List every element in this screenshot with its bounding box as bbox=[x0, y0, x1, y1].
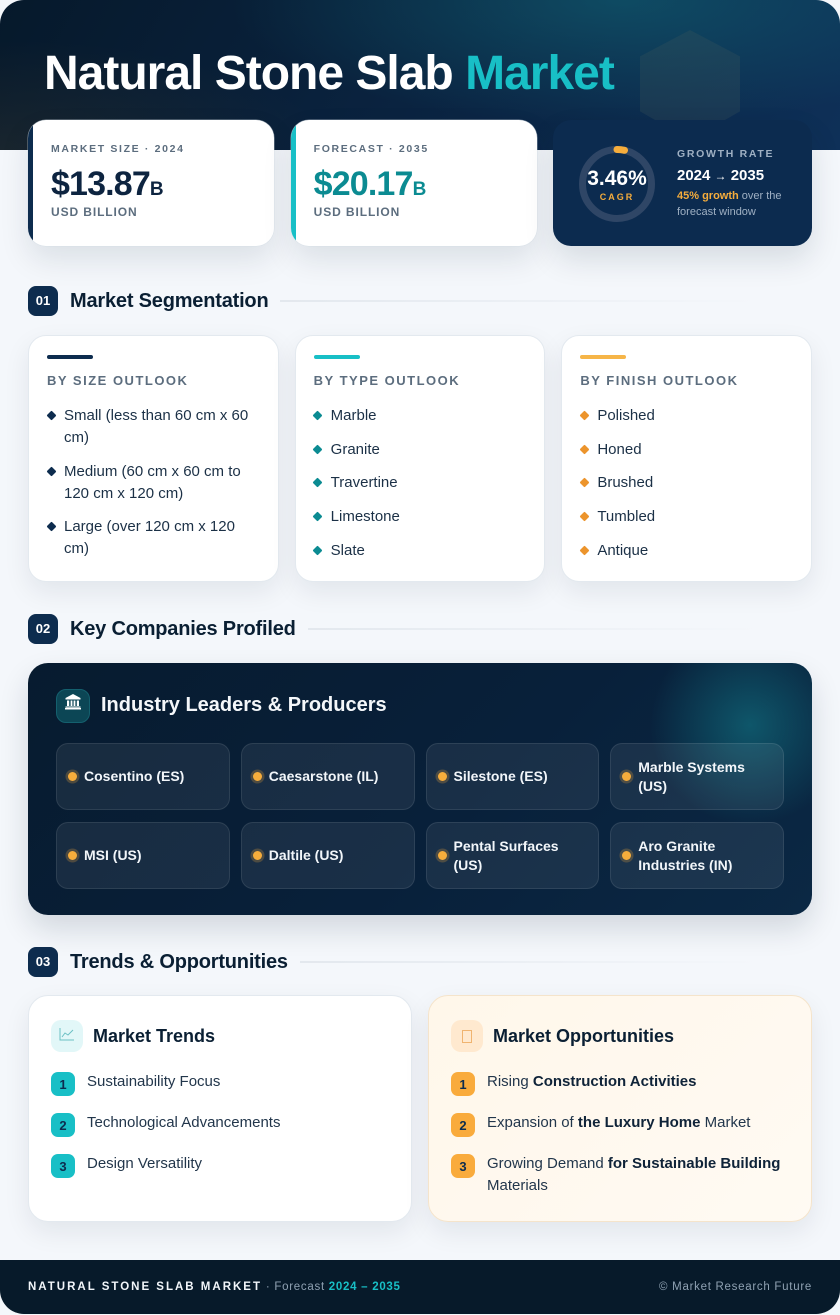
section heading: segmentation: 01 bbox=[36, 293, 50, 308]
stat card: market size: USD BILLION bbox=[51, 205, 138, 219]
company: Pental Surfaces bbox=[426, 822, 599, 889]
CAGR label: CAGR bbox=[600, 192, 634, 202]
company: Cosentino: Cosentino (ES) bbox=[84, 768, 184, 784]
panel: size outlook: 120 cm x 120 cm) bbox=[64, 484, 183, 502]
panel: market opportunities bbox=[428, 995, 812, 1222]
panel: finish outlook: Antique bbox=[597, 542, 648, 558]
panel: market trends: Sustainability Focus bbox=[87, 1072, 220, 1090]
panel: size outlook: cm) bbox=[64, 540, 89, 556]
section heading: companies bbox=[28, 614, 546, 644]
company: Silestone: Silestone (ES) bbox=[454, 768, 548, 784]
panel: size outlook: cm) bbox=[64, 428, 89, 446]
panel: companies bbox=[28, 663, 812, 915]
company: MSI bbox=[56, 822, 230, 889]
panel: market trends bbox=[28, 995, 412, 1222]
stat card: market size: MARKET SIZE · 2024 bbox=[51, 143, 185, 155]
footer title: NATURAL STONE SLAB MARKET · Forecast 2024 – 2035 bbox=[28, 1281, 401, 1293]
panel: market trends: Market Trends bbox=[93, 1026, 215, 1046]
company: MSI: MSI (US) bbox=[84, 847, 142, 863]
growth note bbox=[677, 190, 782, 218]
growth label: GROWTH RATE bbox=[677, 148, 774, 160]
company: Aro Granite: Industries (IN) bbox=[638, 856, 732, 872]
company: Marble Systems: (US) bbox=[638, 778, 667, 794]
footer credit: © Market Research Future bbox=[659, 1281, 812, 1293]
company: Silestone bbox=[426, 743, 599, 810]
section heading: segmentation: Market Segmentation bbox=[70, 290, 268, 312]
title: Natural Stone Slab Market bbox=[44, 47, 614, 100]
company: Pental Surfaces: Pental Surfaces bbox=[454, 838, 559, 854]
panel: market trends: Design Versatility bbox=[87, 1154, 202, 1172]
header banner bbox=[0, 0, 840, 150]
company: Daltile bbox=[241, 822, 414, 889]
section heading: segmentation bbox=[28, 286, 532, 316]
icon: placeholder box bbox=[451, 1020, 483, 1052]
panel heading: Industry Leaders & Producers bbox=[101, 694, 387, 716]
icon: chart bbox=[51, 1020, 83, 1052]
panel: finish outlook: Polished bbox=[597, 406, 655, 424]
growth note: forecast window bbox=[677, 206, 756, 218]
panel: finish outlook: Honed bbox=[597, 440, 642, 458]
company: Aro Granite: Aro Granite bbox=[638, 838, 715, 854]
company: Marble Systems: Marble Systems bbox=[638, 758, 745, 774]
panel: size outlook: Large (over 120 cm x 120 bbox=[64, 518, 235, 534]
company: Cosentino bbox=[56, 743, 230, 810]
panel: market opportunities: Growing Demand for Sustainable Building bbox=[487, 1154, 780, 1172]
panel: market opportunities: 1 bbox=[459, 1077, 467, 1092]
section heading: trends: 03 bbox=[36, 954, 50, 969]
panel: type outlook bbox=[295, 335, 545, 582]
CAGR value: 3.46% bbox=[587, 167, 647, 190]
panel: type outlook: Travertine bbox=[331, 474, 398, 490]
company: Caesarstone: Caesarstone (IL) bbox=[269, 768, 378, 784]
panel: finish outlook: Tumbled bbox=[597, 508, 655, 524]
icon: bank bbox=[56, 689, 90, 723]
decorative hexagon bbox=[640, 30, 740, 120]
company: Pental Surfaces: (US) bbox=[454, 856, 482, 872]
panel: market opportunities: 3 bbox=[459, 1159, 467, 1174]
stat card: market size: $13.87B bbox=[51, 165, 164, 203]
footer bbox=[0, 1260, 840, 1314]
panel: market opportunities: Market Opportunities bbox=[493, 1026, 674, 1046]
section heading: trends bbox=[28, 947, 542, 977]
panel: size outlook bbox=[28, 335, 279, 582]
company: Marble Systems bbox=[610, 743, 784, 810]
panel: market opportunities: Rising Construction Activities bbox=[487, 1072, 696, 1090]
panel: market opportunities: Materials bbox=[487, 1177, 548, 1194]
panel: market trends: Technological Advancements bbox=[87, 1114, 280, 1130]
panel: market trends: 3 bbox=[59, 1159, 67, 1174]
company: Caesarstone bbox=[241, 743, 414, 810]
stat card: forecast bbox=[291, 120, 537, 246]
panel: market opportunities: Expansion of the Luxury Home Market bbox=[487, 1114, 750, 1130]
panel: type outlook: Granite bbox=[331, 440, 380, 458]
panel: market opportunities: 2 bbox=[459, 1118, 467, 1133]
panel: market trends: 2 bbox=[59, 1118, 67, 1133]
panel: finish outlook: BY FINISH OUTLOOK bbox=[580, 373, 738, 388]
growth rate card bbox=[553, 120, 812, 246]
growth note: 45% growth over the bbox=[677, 190, 782, 202]
section heading: trends: Trends & Opportunities bbox=[70, 951, 288, 973]
panel: type outlook: Limestone bbox=[331, 508, 400, 524]
panel: type outlook: Slate bbox=[331, 542, 365, 558]
CAGR ring bbox=[579, 146, 655, 222]
section heading: companies: 02 bbox=[36, 621, 50, 636]
panel: type outlook: BY TYPE OUTLOOK bbox=[314, 373, 460, 388]
stat card: forecast: USD BILLION bbox=[314, 205, 400, 219]
stat card: forecast: FORECAST · 2035 bbox=[314, 143, 429, 155]
stat card: forecast: $20.17B bbox=[314, 165, 426, 203]
panel: size outlook: BY SIZE OUTLOOK bbox=[47, 373, 188, 388]
panel: size outlook: Medium (60 cm x 60 cm to bbox=[64, 462, 241, 480]
panel: size outlook: Small (less than 60 cm x 60 bbox=[64, 406, 248, 424]
growth years: 2024 → 2035 bbox=[677, 167, 764, 184]
panel: finish outlook bbox=[561, 335, 812, 582]
panel: finish outlook: Brushed bbox=[597, 474, 653, 490]
company: Daltile: Daltile (US) bbox=[269, 847, 343, 863]
section heading: companies: Key Companies Profiled bbox=[70, 618, 296, 640]
panel: type outlook: Marble bbox=[331, 406, 377, 424]
company: Aro Granite bbox=[610, 822, 784, 889]
panel: market trends: 1 bbox=[59, 1077, 67, 1092]
stat card: market size bbox=[28, 120, 274, 246]
